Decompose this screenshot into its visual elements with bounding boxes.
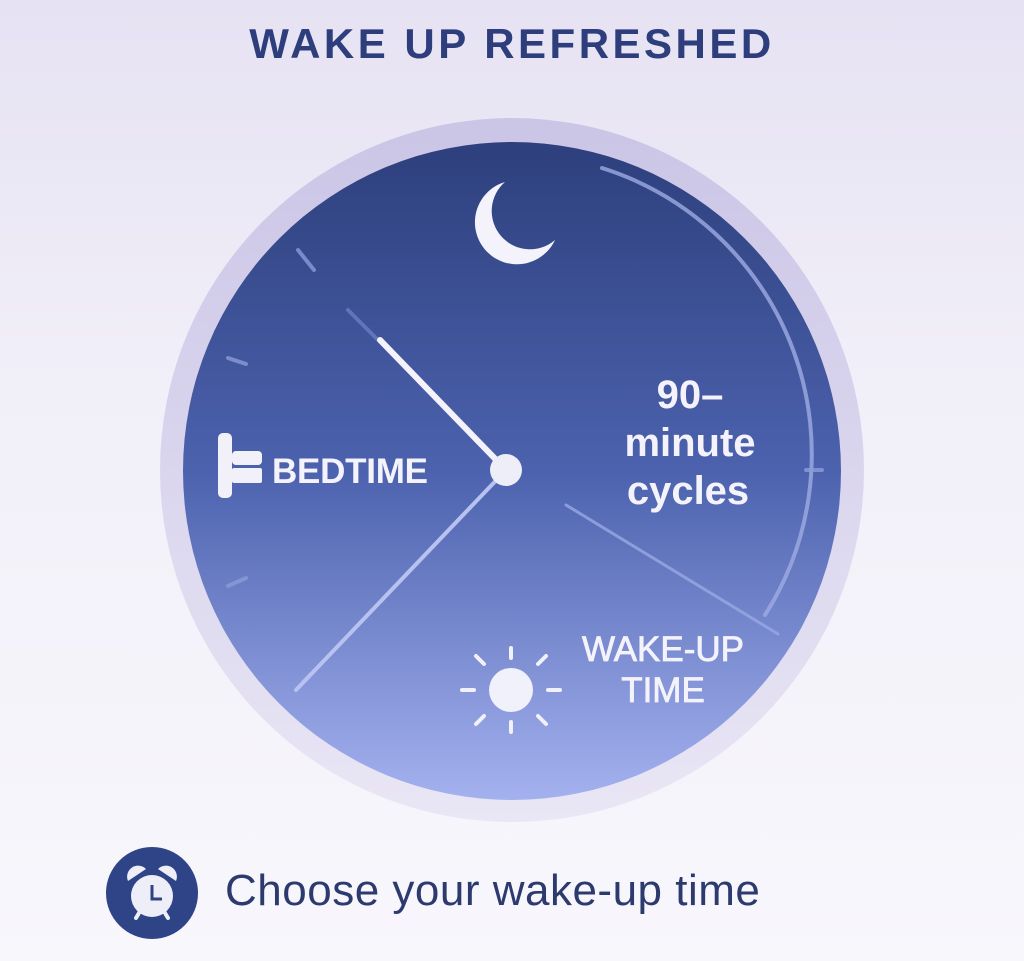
label: 90-minute cycles: minute [624,421,756,465]
label: bedtime: BEDTIME [272,452,428,491]
label: wake-up time: WAKE-UP [582,630,744,669]
icon: sun [462,648,560,732]
clock hands [296,340,522,690]
icon: moon [475,182,555,264]
label: wake-up time: TIME [621,671,705,710]
icon: bed [218,433,262,498]
icon: alarm clock [106,847,198,939]
tick marks and arc [228,168,822,690]
title: WAKE UP REFRESHED [249,20,775,67]
caption: Choose your wake-up time [225,866,760,915]
label: 90-minute cycles: cycles [627,469,749,513]
label: 90-minute cycles: 90– [657,373,723,417]
